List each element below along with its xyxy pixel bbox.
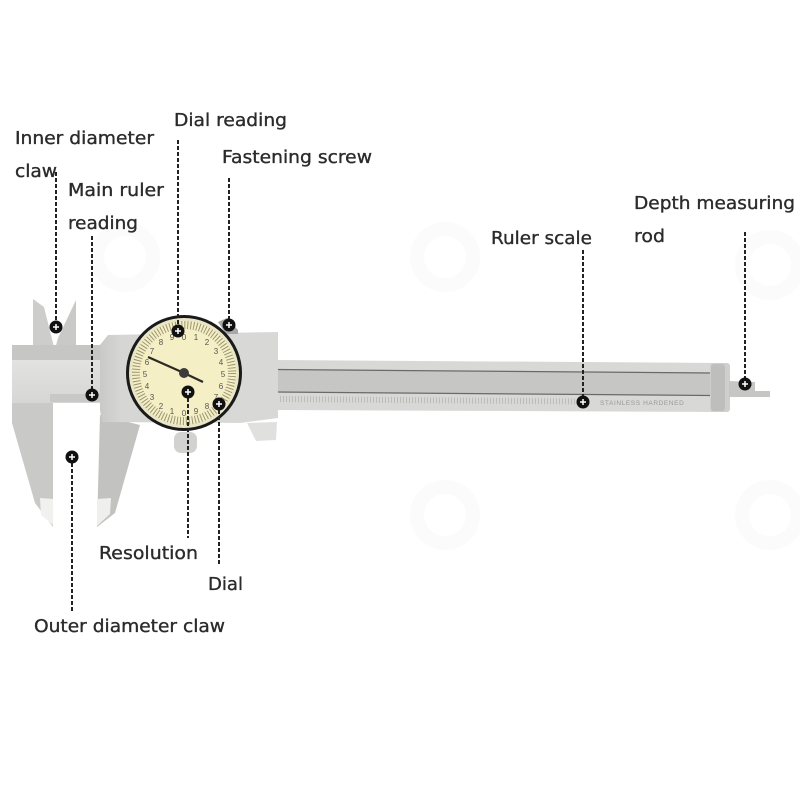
bottom knob (174, 432, 197, 453)
outer diameter jaws (12, 400, 140, 527)
dial numbers: 7 (214, 393, 219, 402)
dial (126, 315, 242, 431)
needle (148, 357, 203, 382)
dial numbers: 1 (194, 333, 199, 342)
dial numbers (143, 333, 226, 418)
labels: Depth measuring (634, 193, 795, 214)
labels: Main ruler (68, 180, 165, 201)
labels: Fastening screw (222, 147, 372, 168)
depth rod (729, 381, 770, 397)
dial numbers: 4 (219, 358, 224, 367)
labels: claw (15, 161, 57, 182)
inner diameter jaws (12, 299, 100, 361)
labels: reading (68, 213, 138, 234)
labels: Outer diameter claw (34, 616, 225, 637)
labels: Inner diameter (15, 128, 155, 149)
dial numbers: 1 (170, 407, 175, 416)
end cap (710, 363, 730, 412)
dial numbers: 3 (150, 393, 155, 402)
dial numbers: 9 (170, 333, 175, 342)
fastening screw (218, 318, 238, 334)
leader lines (56, 140, 745, 612)
markers (50, 318, 752, 464)
labels: Dial reading (174, 110, 287, 131)
dial numbers: 8 (205, 402, 210, 411)
ruler: STAINLESS HARDENED (600, 400, 684, 407)
main beam (12, 360, 102, 403)
dial numbers: 3 (214, 347, 219, 356)
ruler (276, 360, 722, 412)
caliper (12, 299, 770, 527)
labels: rod (634, 226, 665, 247)
slider body (100, 332, 278, 423)
dial numbers: 4 (145, 382, 150, 391)
labels: Resolution (99, 543, 198, 564)
labels: Dial (208, 574, 243, 595)
dial numbers: 5 (221, 370, 226, 379)
dial numbers: 7 (150, 347, 155, 356)
dial numbers: 6 (219, 382, 224, 391)
dial numbers: 6 (145, 358, 150, 367)
dial numbers: 9 (194, 407, 199, 416)
labels (15, 110, 795, 637)
dial numbers: 8 (159, 338, 164, 347)
thumb wheel (247, 422, 277, 441)
dial numbers: 2 (159, 402, 164, 411)
dial numbers: 5 (143, 370, 148, 379)
dial numbers: 0 (182, 333, 187, 342)
dial numbers: 0 (182, 409, 187, 418)
labels: Ruler scale (491, 228, 592, 249)
dial numbers: 2 (205, 338, 210, 347)
